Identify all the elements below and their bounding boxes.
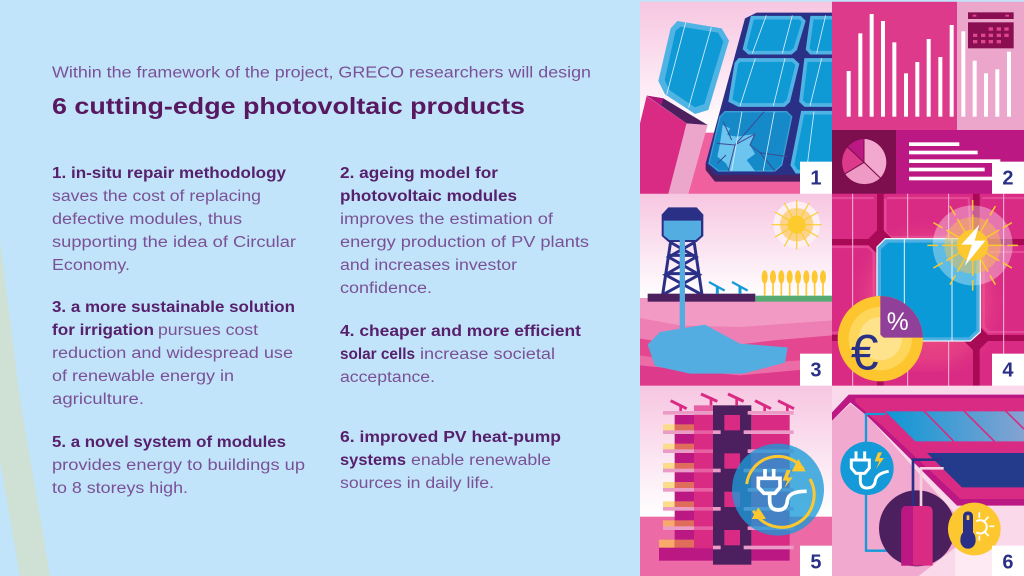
text block: product 4	[340, 323, 581, 386]
decorative green curved band	[0, 240, 50, 576]
text block: product 3: pursues cost	[158, 322, 259, 339]
icon: solar panel with cracked cell	[706, 13, 835, 182]
grass strip	[755, 296, 832, 302]
text block: product 4: increase societal	[420, 346, 555, 363]
text block: product 1: supporting the idea of Circular	[52, 234, 296, 251]
panel: tile 5 building-integrated modules	[640, 386, 832, 576]
panel: tile 2 data and charts	[832, 2, 1024, 194]
text block: product 3: reduction and widespread use	[52, 345, 293, 362]
text block: product 3: for irrigation	[52, 322, 154, 339]
text block: product 4: solar cells	[340, 346, 415, 363]
text block: product 1: defective modules, thus	[52, 211, 242, 228]
icon: building with solar modules	[659, 394, 794, 565]
label: number 4	[992, 354, 1024, 386]
label: number 4: 4	[1002, 359, 1014, 381]
icon: calendar	[968, 12, 1014, 48]
text block: product 5	[52, 434, 305, 497]
icon: percent wedge	[880, 296, 923, 338]
label: number 1	[800, 162, 832, 194]
text block: product 3: 3. a more sustainable solution	[52, 299, 295, 316]
text lines list	[909, 142, 1000, 180]
label: number 1: 1	[810, 167, 822, 189]
icon: euro coin: €	[851, 324, 879, 380]
text block: product 6	[340, 429, 561, 492]
text block: product 6: sources in daily life.	[340, 475, 494, 492]
icon: plug with lightning	[840, 442, 894, 495]
panel: tile 6 PV heat-pump house	[832, 386, 1024, 576]
icon: wheat field	[762, 270, 826, 296]
text block: product 6: systems	[340, 452, 406, 469]
text block: product 3: of renewable energy in	[52, 368, 234, 385]
text block: product 5: 5. a novel system of modules	[52, 434, 286, 451]
label: number 6	[992, 546, 1024, 576]
text block: product 4: acceptance.	[340, 369, 435, 386]
text block: product 2: confidence.	[340, 280, 432, 297]
text block: product 6: enable renewable	[411, 452, 551, 469]
water pipe and aquifer	[648, 240, 788, 374]
panel: tile 4 cheaper efficient cells	[829, 194, 1024, 386]
text block: product 5: to 8 storeys high.	[52, 480, 188, 497]
label: number 3	[800, 354, 832, 386]
text block: product 5: provides energy to buildings up	[52, 457, 305, 474]
icon: thermometer and sun	[948, 503, 1001, 555]
text block: product 1: 1. in-situ repair methodology	[52, 165, 286, 182]
background	[0, 0, 640, 576]
text block: product 6: 6. improved PV heat-pump	[340, 429, 561, 446]
text block: product 1: saves the cost of replacing	[52, 188, 261, 205]
wiring	[866, 414, 904, 551]
roof and solar array	[832, 395, 1024, 506]
text block: product 3: agriculture.	[52, 391, 144, 408]
label: number 5: 5	[810, 551, 822, 573]
label: number 2: 2	[1002, 167, 1014, 189]
text block: product 4: 4. cheaper and more efficient	[340, 323, 581, 340]
ground bar	[648, 294, 755, 302]
panel: tile 1 damaged solar module	[640, 2, 835, 194]
pie chart	[842, 138, 887, 185]
icon: loose solar cell	[658, 21, 729, 114]
text block: product 2: photovoltaic modules	[340, 188, 517, 205]
panel: tile 3 irrigation	[640, 194, 832, 386]
label: number 5	[800, 546, 832, 576]
icon: sun	[772, 200, 822, 250]
label: number 3: 3	[810, 359, 822, 381]
label: number 2	[992, 162, 1024, 194]
icon: plug with renewal arrows	[732, 444, 824, 536]
icon: water tower	[662, 207, 703, 295]
title: 6 cutting-edge photovoltaic products	[52, 93, 525, 119]
intro line: Within the framework of the project, GRECO researchers will design	[52, 64, 591, 82]
icon: heat pump	[879, 460, 955, 566]
text block: product 3	[52, 299, 295, 408]
icon: small solar trackers	[709, 282, 748, 294]
icon: euro coin	[838, 296, 923, 381]
text block: product 2: energy production of PV plants	[340, 234, 589, 251]
icon: percent wedge: %	[887, 309, 909, 336]
icon: sun with lightning bolt	[926, 199, 1019, 292]
icon: solar cell	[877, 239, 980, 341]
bar chart	[847, 14, 1011, 117]
text block: product 2: improves the estimation of	[340, 211, 554, 228]
text block: product 2	[340, 165, 589, 297]
label: number 6: 6	[1002, 551, 1014, 573]
text block: product 2: 2. ageing model for	[340, 165, 498, 182]
text block: product 1: Economy.	[52, 257, 130, 274]
text block: product 2: and increases investor	[340, 257, 517, 274]
text block: product 1	[52, 165, 296, 274]
